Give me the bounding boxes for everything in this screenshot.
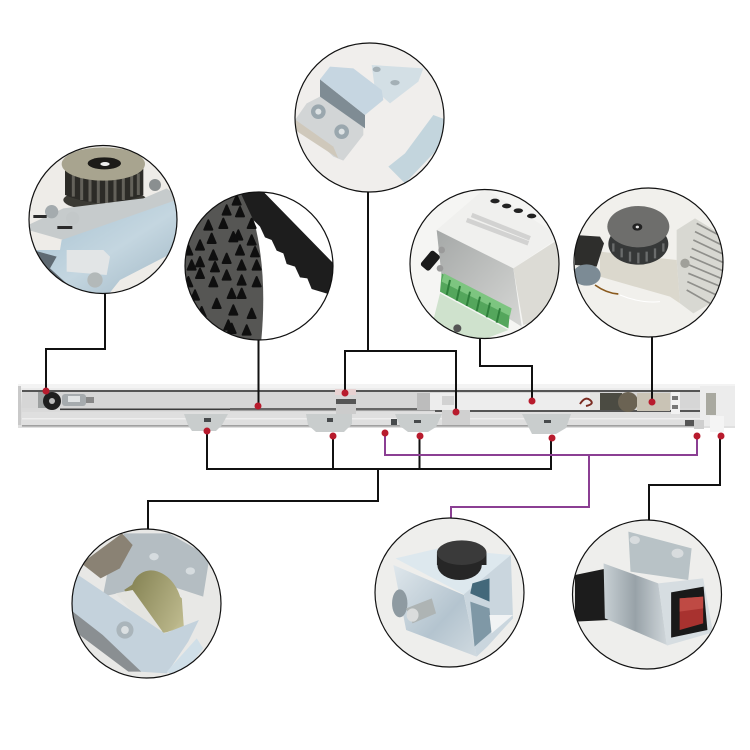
callout: bracket with red rocker switch (569, 515, 727, 675)
connector lines: purple (385, 433, 697, 518)
red marker dots (42, 388, 724, 442)
idler pulley (38, 392, 94, 410)
motor (580, 392, 680, 414)
callout: rubber stop bracket (372, 515, 528, 672)
door hanger carriages (184, 414, 571, 434)
callout: hanger roller wheel (69, 525, 227, 682)
connector lines: black (46, 192, 720, 529)
callout: belt clamp bracket (290, 40, 450, 193)
belt clamp (335, 389, 356, 414)
callout: drive motor with pulley (573, 187, 724, 338)
callout: drive pulley on bracket (28, 144, 178, 294)
callout: control unit with green terminal block (409, 188, 560, 340)
callout: toothed timing belt (184, 191, 334, 341)
door rail assembly (18, 384, 735, 434)
